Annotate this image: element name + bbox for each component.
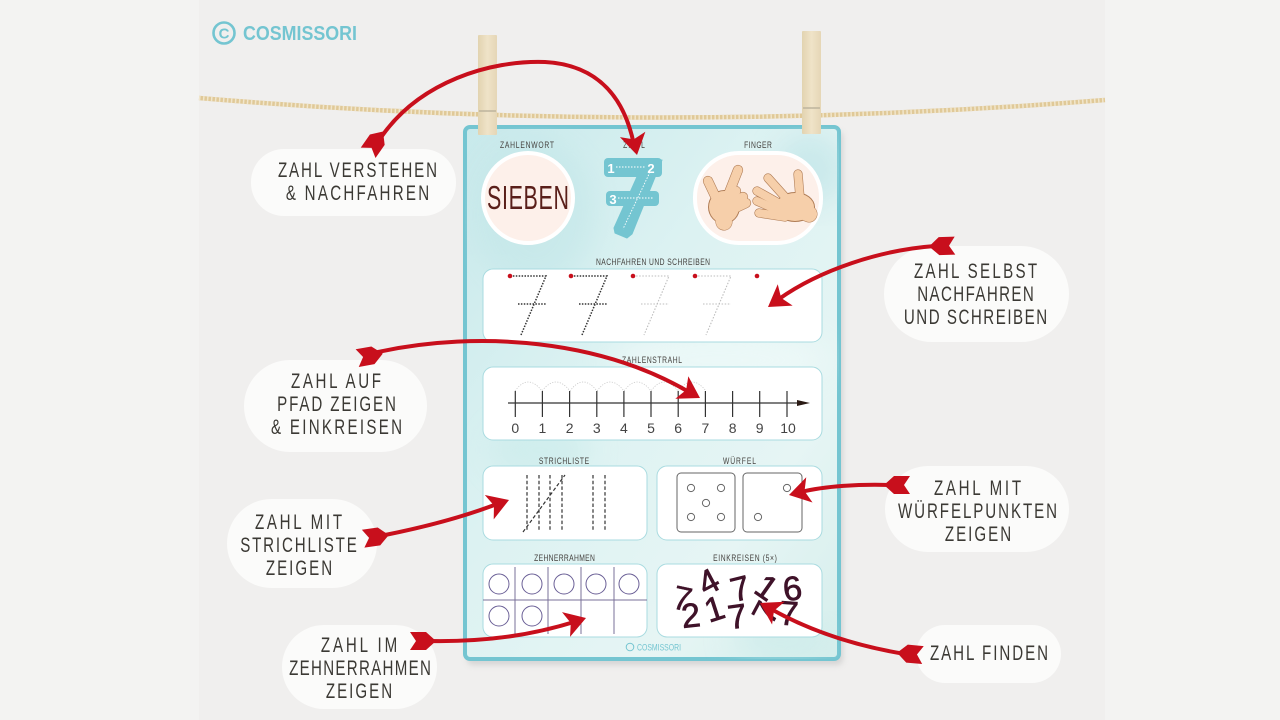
callout: Zahl finden: ZAHL FINDEN xyxy=(930,640,1048,665)
panel: number line: 3 xyxy=(593,420,601,436)
panel: find and circle digits: 6 xyxy=(780,569,804,609)
panel: number line: 0 xyxy=(511,420,519,436)
panel: ten frame xyxy=(483,564,647,637)
callout: Würfelpunkte xyxy=(885,466,1069,552)
callout: Zahl selbst: ZAHL SELBST xyxy=(914,258,1037,283)
footer logo: COSMISSORI xyxy=(637,642,681,652)
panel: number line: 8 xyxy=(729,420,737,436)
panel: find and circle digits: 7 xyxy=(778,594,800,634)
callout: Würfelpunkte: WÜRFELPUNKTEN xyxy=(898,498,1057,523)
arrow: to tracing panel xyxy=(761,237,955,318)
callout: Strichliste: ZAHL MIT xyxy=(255,509,342,534)
callout: Zehnerrahmen: ZEHNERRAHMEN xyxy=(289,655,431,680)
arrow: to digit field xyxy=(754,592,924,664)
footer logo xyxy=(626,642,681,652)
poster xyxy=(465,127,845,665)
logo: Cosmissori: COSMISSORI xyxy=(243,23,357,45)
clothespin right xyxy=(802,31,821,134)
callout: Zahl auf Pfad: & EINKREISEN xyxy=(271,414,402,439)
panel: find and circle digits: 2 xyxy=(679,596,702,636)
panel: number line: 7 xyxy=(702,420,710,436)
callout: Zahl selbst: NACHFAHREN xyxy=(917,281,1034,306)
callout: Zahl selbst xyxy=(884,246,1069,342)
label: Zehnerrahmen: ZEHNERRAHMEN xyxy=(534,553,595,563)
teal numeral seven with stroke order: 3 xyxy=(609,192,617,207)
icon: right hand xyxy=(757,174,815,222)
word circle: Sieben: SIEBEN xyxy=(487,179,569,216)
rope xyxy=(199,98,1105,118)
callout: Zahl verstehen: ZAHL VERSTEHEN xyxy=(278,157,437,182)
callout: Zahl verstehen: & NACHFAHREN xyxy=(286,180,429,205)
word circle: Sieben xyxy=(483,153,573,243)
panel: find and circle digits: 1 xyxy=(748,567,785,609)
label: Strichliste: STRICHLISTE xyxy=(539,456,589,466)
callout: Würfelpunkte: ZEIGEN xyxy=(945,521,1011,546)
arrow: to ten frame xyxy=(410,606,590,650)
callout: Zahl auf Pfad: PFAD ZEIGEN xyxy=(277,391,396,416)
panel: find and circle digits: 7 xyxy=(725,597,749,637)
panel: dice xyxy=(657,466,822,540)
panel: tracing sevens xyxy=(483,269,822,342)
label: Nachfahren und Schreiben: NACHFAHREN UND SCHREIBEN xyxy=(596,257,710,267)
callout: Zahl auf Pfad xyxy=(244,360,427,452)
arrow: to numeral seven xyxy=(361,62,650,158)
callout: Zehnerrahmen: ZEIGEN xyxy=(326,678,392,703)
teal numeral seven with stroke order: 2 xyxy=(647,161,655,176)
panel: number line: 6 xyxy=(674,420,682,436)
finger circle with hands xyxy=(695,153,821,243)
arrow: to dice xyxy=(786,476,910,508)
panel: number line: 1 xyxy=(539,420,547,436)
label: Würfel: WÜRFEL xyxy=(723,456,756,466)
callout: Würfelpunkte: ZAHL MIT xyxy=(934,475,1021,500)
teal numeral seven with stroke order xyxy=(604,158,662,238)
panel: tally marks xyxy=(483,466,647,540)
clothespin left xyxy=(478,35,497,135)
arrow: to tally marks xyxy=(362,488,513,548)
panel: number line: 5 xyxy=(647,420,655,436)
teal numeral seven with stroke order: 1 xyxy=(607,161,615,176)
panel: find and circle digits: 7 xyxy=(669,579,695,620)
panel: number line: 2 xyxy=(566,420,574,436)
callout: Zahl verstehen xyxy=(251,149,456,216)
label: Einkreisen: EINKREISEN (5×) xyxy=(713,553,777,563)
label: Zahlenstrahl: ZAHLENSTRAHL xyxy=(622,355,682,365)
callout: Strichliste: ZEIGEN xyxy=(266,555,332,580)
panel: number line: 10 xyxy=(780,420,796,436)
label: Zahlenwort: ZAHLENWORT xyxy=(500,140,554,150)
label: Zahl: ZAHL xyxy=(623,140,645,150)
panel: number line xyxy=(483,367,822,440)
callout: Strichliste xyxy=(227,499,377,588)
callout: Zehnerrahmen: ZAHL IM xyxy=(321,632,397,657)
callout: Strichliste: STRICHLISTE xyxy=(240,532,357,557)
callout: Zahl finden xyxy=(916,625,1061,683)
panel: find and circle digits: 7 xyxy=(745,596,788,630)
panel: find and circle digits: 4 xyxy=(692,561,726,604)
panel: find and circle digits: 7 xyxy=(727,569,754,610)
panel: find and circle digits xyxy=(657,561,822,637)
panel: number line: 4 xyxy=(620,420,628,436)
callout: Zahl selbst: UND SCHREIBEN xyxy=(904,304,1047,329)
callout: Zahl auf Pfad: ZAHL AUF xyxy=(291,368,381,393)
arrow: to number line xyxy=(356,341,706,409)
icon: left hand xyxy=(708,170,746,224)
label: Finger: FINGER xyxy=(744,140,772,150)
logo: Cosmissori: C xyxy=(219,26,230,42)
callout: Zehnerrahmen xyxy=(282,625,437,709)
panel: number line: 9 xyxy=(756,420,764,436)
panel: find and circle digits: 1 xyxy=(700,589,729,631)
